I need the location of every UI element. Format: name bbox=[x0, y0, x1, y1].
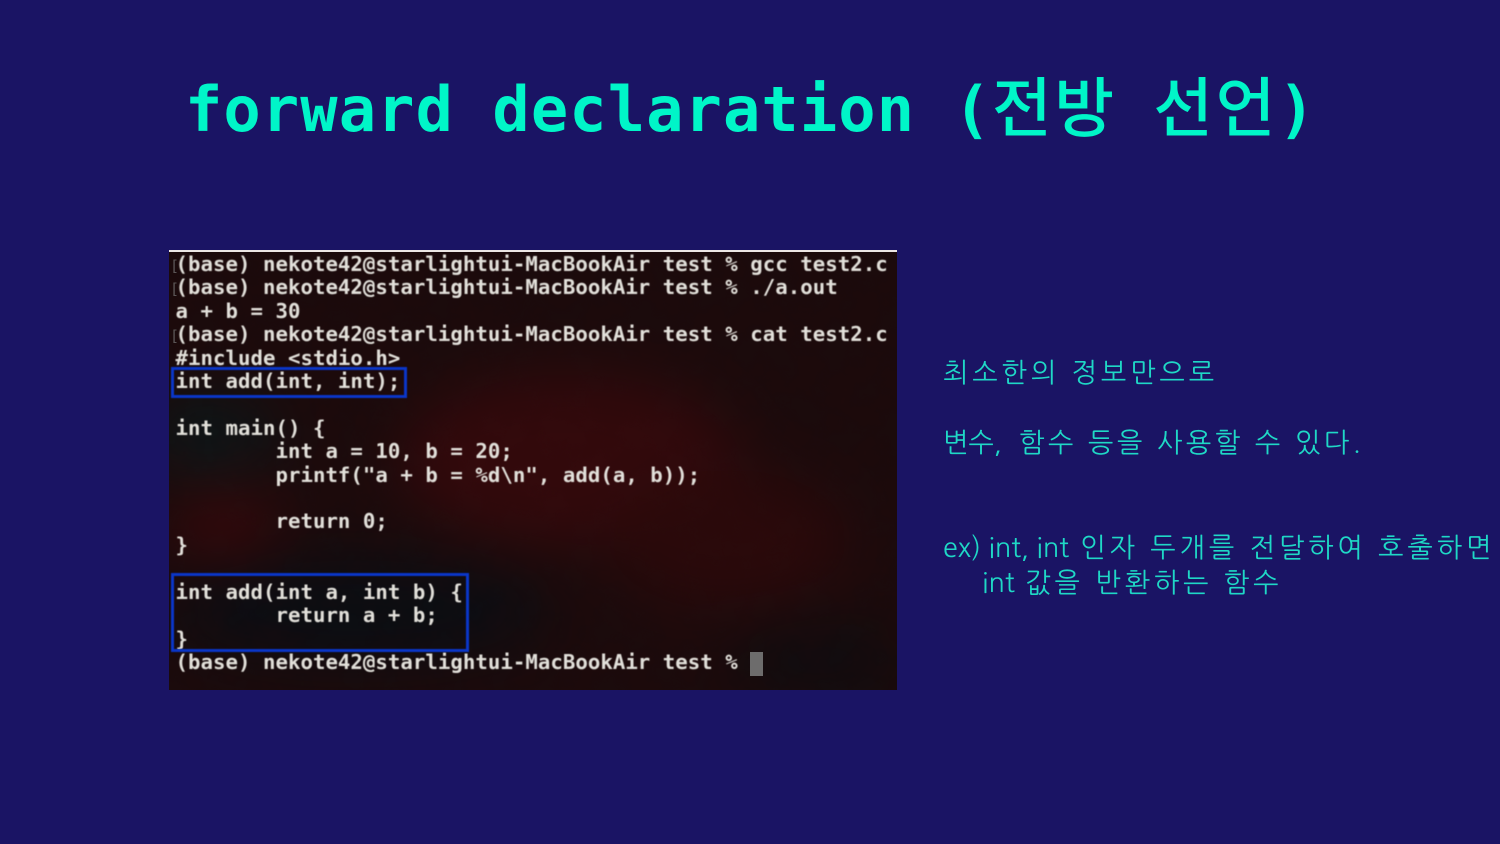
highlight box: declaration bbox=[171, 367, 407, 398]
cursor bbox=[750, 652, 763, 676]
top edge line bbox=[169, 250, 897, 252]
text: example line 1: ex) int, int 인자 두개를 전달하여 호출하면 bbox=[943, 534, 1495, 561]
text: minimal info: 최소한의 정보만으로 bbox=[943, 359, 1218, 386]
text: usable: 변수, 함수 등을 사용할 수 있다. bbox=[943, 429, 1365, 456]
text: example line 2: int 값을 반환하는 함수 bbox=[982, 569, 1282, 596]
prompt bracket marks: [ [ [ bbox=[170, 257, 179, 345]
highlight box: definition bbox=[171, 573, 469, 652]
terminal screenshot bbox=[169, 250, 897, 690]
terminal background blotches bbox=[169, 365, 850, 674]
title: forward declaration (전방 선언) bbox=[185, 56, 1316, 150]
terminal text: (base) nekote42@starlightui-MacBookAir test % gcc test2.c (base) nekote42@starlightui-MacBookAir test % ./a.out a + b = 30 (base) nekote42@starlightui-MacBookAir test % cat test2.c #include <stdio.h> int add(int, int); int main() { int a = 10, b = 20; printf("a + b = %d\n", add(a, b)); return 0; } int add(int a, int b) { return a + b; } (base) nekote42@starlightui-MacBookAir test % bbox=[176, 252, 888, 674]
